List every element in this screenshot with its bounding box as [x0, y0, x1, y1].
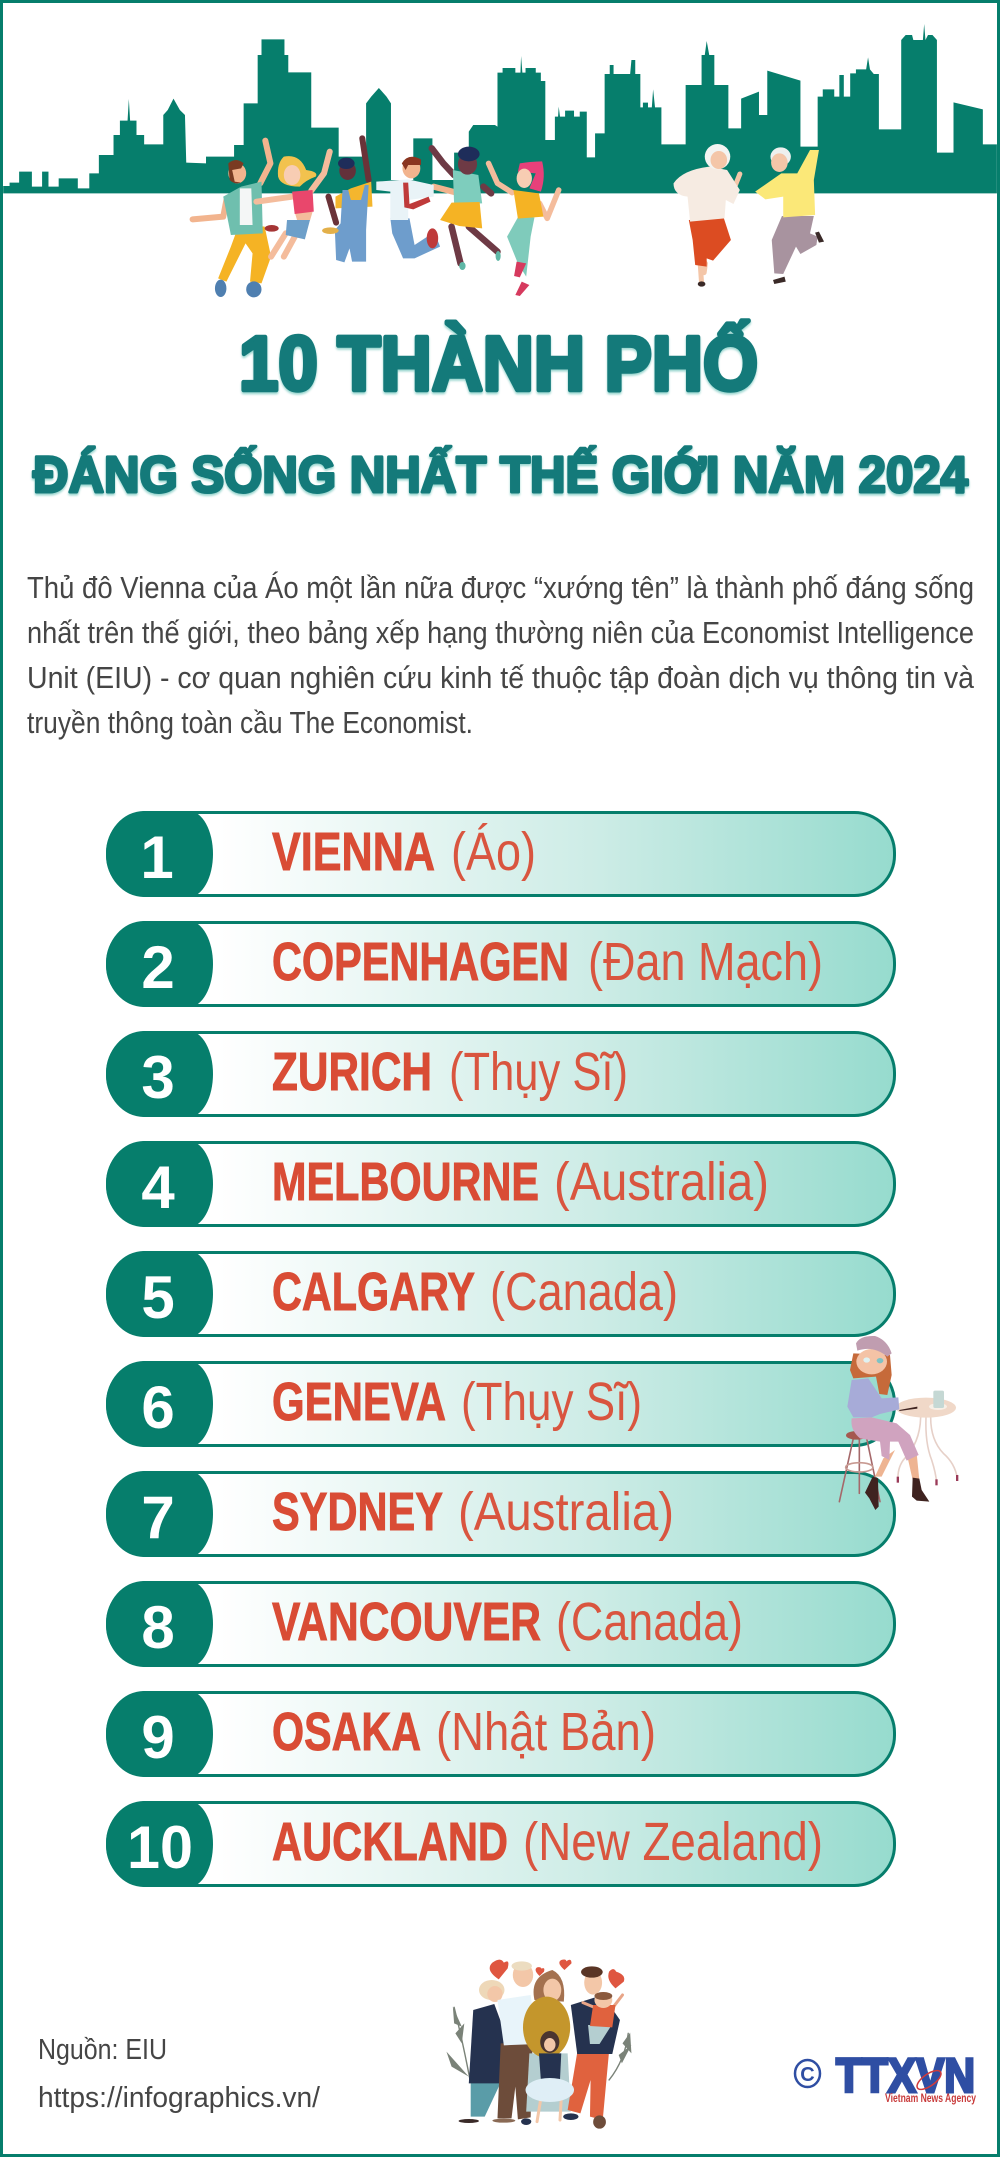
row 3: Zurich: 3: [141, 1044, 175, 1111]
person: elderly man: [755, 147, 824, 284]
stool: [839, 1431, 880, 1502]
row 8: Vancouver: (Canada): [556, 1592, 743, 1652]
illustration: jumping young people: [193, 138, 559, 297]
row 5: Calgary: [106, 1251, 894, 1337]
row 5: Calgary: CALGARY: [272, 1262, 475, 1322]
girl: [526, 2031, 574, 2122]
mother: [521, 1970, 578, 2125]
grandfather: [492, 1961, 537, 2123]
grandmother: [459, 1980, 505, 2123]
row 3: Zurich: (Thụy Sĩ): [449, 1042, 628, 1102]
row 2: Copenhagen: (Đan Mạch): [588, 932, 823, 992]
row 10: Auckland: (New Zealand): [523, 1812, 823, 1872]
copyright mark: C: [800, 2064, 815, 2086]
source text: Nguồn: EIU: [38, 2034, 167, 2066]
copyright mark: [795, 2060, 820, 2087]
row 9: Osaka: OSAKA: [272, 1702, 421, 1762]
row 2: Copenhagen: [106, 921, 894, 1007]
row 9: Osaka: (Nhật Bản): [436, 1702, 656, 1762]
row 1: Vienna: 1: [140, 824, 174, 891]
person: man in overalls: [322, 138, 372, 262]
row 4: Melbourne: [106, 1141, 894, 1227]
row 4: Melbourne: (Australia): [554, 1152, 769, 1212]
row 4: Melbourne: MELBOURNE: [272, 1152, 539, 1212]
illustration: elderly couple dancing: [674, 144, 824, 287]
row 7: Sydney: 7: [141, 1484, 175, 1551]
row 10: Auckland: AUCKLAND: [272, 1812, 508, 1872]
person: elderly woman: [674, 144, 740, 287]
row 1: Vienna: VIENNA: [272, 822, 435, 882]
baby in father's arms: [583, 1992, 622, 2044]
illustration: city skyline: [3, 24, 997, 193]
title line 2: ĐÁNG SỐNG NHẤT THẾ GIỚI NĂM 2024: [33, 445, 969, 503]
row 10: Auckland: 10: [127, 1814, 193, 1881]
cafe table with glass: [896, 1391, 958, 1485]
person: bearded man: [193, 141, 271, 297]
title line 1: 10 THÀNH PHỐ: [239, 320, 758, 407]
woman: [847, 1336, 929, 1510]
row 1: Vienna: (Áo): [451, 822, 536, 882]
row 6: Geneva: [106, 1361, 894, 1447]
source text: [38, 2034, 321, 2114]
row 1: Vienna: [106, 811, 894, 897]
person: blonde woman: [256, 152, 330, 257]
row 7: Sydney: [106, 1471, 894, 1557]
row 3: Zurich: ZURICH: [272, 1042, 432, 1102]
row 2: Copenhagen: 2: [141, 934, 175, 1001]
illustration: woman at cafe table: [839, 1336, 958, 1510]
row 8: Vancouver: [106, 1581, 894, 1667]
ranking list: [106, 811, 894, 1887]
intro paragraph: [27, 570, 975, 740]
row 9: Osaka: [106, 1691, 894, 1777]
row 3: Zurich: [106, 1031, 894, 1117]
row 9: Osaka: 9: [141, 1704, 175, 1771]
row 2: Copenhagen: COPENHAGEN: [272, 932, 569, 992]
father: [568, 1966, 620, 2129]
row 7: Sydney: (Australia): [458, 1482, 674, 1542]
hearts: [490, 1960, 624, 1988]
source text: https://infographics.vn/: [38, 2082, 321, 2114]
row 6: Geneva: 6: [141, 1374, 175, 1441]
row 4: Melbourne: 4: [141, 1154, 175, 1221]
leaves: [446, 2007, 631, 2080]
row 8: Vancouver: VANCOUVER: [272, 1592, 541, 1652]
illustration: family with hearts: [446, 1960, 631, 2129]
person: woman with pink hair: [489, 161, 559, 296]
row 5: Calgary: 5: [141, 1264, 175, 1331]
logo: TTXVN Vietnam News Agency: [795, 2050, 976, 2105]
intro paragraph: truyền thông toàn cầu The Economist.: [27, 705, 473, 740]
row 6: Geneva: (Thụy Sĩ): [461, 1372, 642, 1432]
row 7: Sydney: SYDNEY: [272, 1482, 443, 1542]
row 8: Vancouver: 8: [141, 1594, 175, 1661]
row 6: Geneva: GENEVA: [272, 1372, 446, 1432]
row 5: Calgary: (Canada): [490, 1262, 678, 1322]
row 10: Auckland: [106, 1801, 894, 1887]
person: woman in yellow skirt: [432, 147, 501, 270]
person: man with tie: [376, 157, 457, 258]
logo: TTXVN Vietnam News Agency: TTXVN: [836, 2050, 975, 2103]
